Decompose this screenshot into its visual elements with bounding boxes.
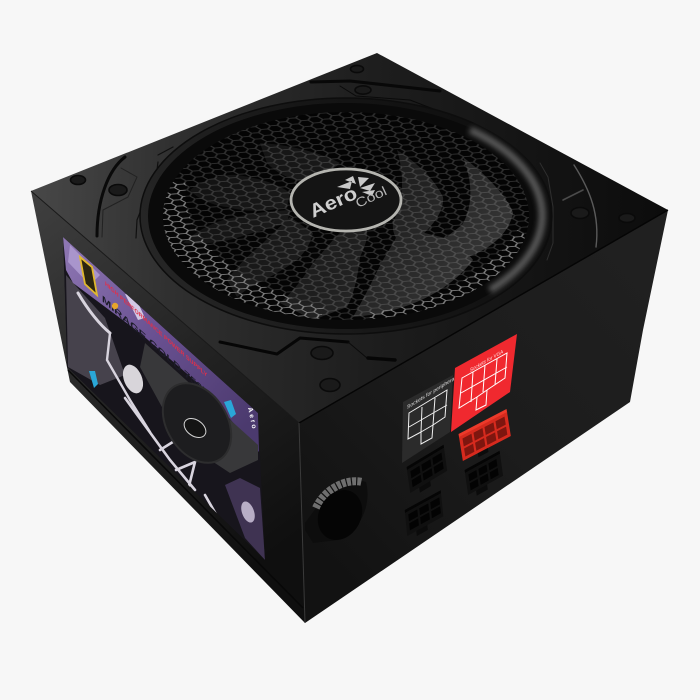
mini psu hub xyxy=(184,418,206,438)
character head xyxy=(122,364,144,394)
left side face xyxy=(31,191,305,623)
fan surround grooves xyxy=(97,81,597,360)
lit mesh rim xyxy=(170,180,320,322)
grommet flange xyxy=(305,480,368,543)
orange circle xyxy=(112,303,118,309)
fan outer ring xyxy=(140,98,552,334)
grey figure background xyxy=(66,275,125,385)
dark headline: MIRAGE GOLD 750W xyxy=(102,293,214,404)
purple band xyxy=(63,237,259,452)
anime character illustration xyxy=(76,291,217,514)
red connector xyxy=(459,409,511,465)
right side face xyxy=(299,210,668,623)
right arc groove xyxy=(574,165,597,247)
peripherals caption: Sockets for peripherals xyxy=(407,374,458,411)
blue logos xyxy=(89,371,98,388)
black connector lower xyxy=(405,490,444,541)
panel sockets for peripherals xyxy=(402,374,458,463)
light streaks xyxy=(68,245,100,280)
grommet ribbed collar xyxy=(316,481,362,508)
panel sockets for VGA xyxy=(451,334,517,432)
logo mark xyxy=(337,176,375,196)
left arc groove xyxy=(97,157,125,236)
bottom groove xyxy=(220,338,348,354)
VGA background xyxy=(451,334,517,432)
mini psu image xyxy=(140,343,258,473)
peripherals grid xyxy=(408,390,447,444)
peripherals background xyxy=(402,375,453,463)
product label on left face xyxy=(63,237,265,560)
product illustration: power supply unit xyxy=(30,53,668,623)
fan blades xyxy=(183,143,513,320)
purple lower artwork xyxy=(225,478,265,560)
VGA grid xyxy=(459,353,507,410)
cable grommet xyxy=(305,480,371,548)
top face xyxy=(31,53,668,423)
brand mark on label: Aero xyxy=(246,407,257,429)
black connector upper left xyxy=(407,445,448,498)
right bright rim xyxy=(470,130,542,290)
gold badge xyxy=(80,257,97,295)
logo badge xyxy=(291,169,401,231)
fan grill xyxy=(163,112,529,320)
left ring step xyxy=(136,147,173,238)
badge disc xyxy=(291,169,401,231)
fan inner recess xyxy=(148,103,544,329)
VGA caption: Sockets for VGA xyxy=(470,349,503,374)
top groove xyxy=(311,81,440,91)
logo text Aero: Aero xyxy=(306,183,361,223)
red headline: HIGH PERFORMANCE POWER SUPPLY xyxy=(105,281,207,379)
hexagon mesh xyxy=(164,112,529,320)
edge lines xyxy=(31,191,668,623)
grommet hole xyxy=(309,482,371,548)
screws on top face xyxy=(70,65,635,392)
logo text Cool: Cool xyxy=(353,183,389,211)
black connector right xyxy=(465,451,504,500)
